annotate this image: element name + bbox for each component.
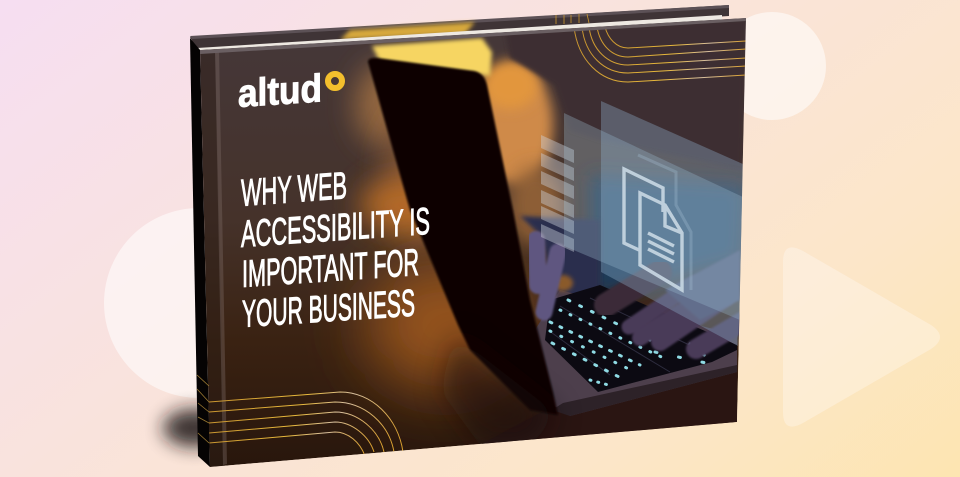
logo: altudo [238,67,342,116]
cover hinge highlight [215,50,227,465]
book shadow [163,409,227,447]
spine [190,38,210,467]
pages [197,15,722,52]
logo yellow ring [328,74,342,88]
cover top rim [200,18,746,54]
front document [640,193,682,290]
back document [624,169,663,250]
dark navy band behind left hand [520,216,600,300]
photo glow: warm orange wall [355,38,563,390]
title line 1: WHY WEB [241,165,347,215]
laptop lid lower shade [440,335,558,445]
front cover [200,18,746,467]
logo wordmark: altud [238,67,322,116]
decorative background shapes [104,12,940,427]
keyboard keys [550,300,720,386]
back cover warm reflection [340,22,475,40]
shape: top right circle [718,12,826,120]
upper hand back [665,250,740,320]
laptop lid [368,58,558,415]
laptop base [535,285,737,416]
document icon [624,169,682,290]
orange gap between left hand fingers [553,275,573,291]
title line 4: YOUR BUSINESS [242,283,415,336]
right hand fingers [629,283,742,349]
document lines [648,233,674,262]
holographic panel back [564,113,745,320]
gold line stubs on spine [197,375,209,443]
right side blue blur [590,175,745,300]
gold lines bottom left [209,392,403,456]
shape: right play triangle [783,247,940,427]
desk lower right [482,372,737,444]
gold line stubs on back cover [556,14,589,24]
title [241,165,430,336]
holographic panel front [601,101,745,346]
shape: left circle [104,208,294,398]
book [190,5,746,467]
back cover top edge highlight [190,5,729,39]
back cover [190,5,729,49]
hands [536,240,742,349]
dark upper right of photo [505,18,746,170]
left hand fingers [536,240,558,312]
title line 3: IMPORTANT FOR [242,242,419,296]
title line 2: ACCESSIBILITY IS [241,201,430,256]
gold lines top right [574,27,746,82]
right hand knuckle [606,272,660,305]
holographic stripes [541,135,574,252]
cover base [200,18,746,467]
ghost document icon [638,155,691,290]
cover hinge groove [200,49,225,467]
keyboard key row separators [548,298,700,375]
